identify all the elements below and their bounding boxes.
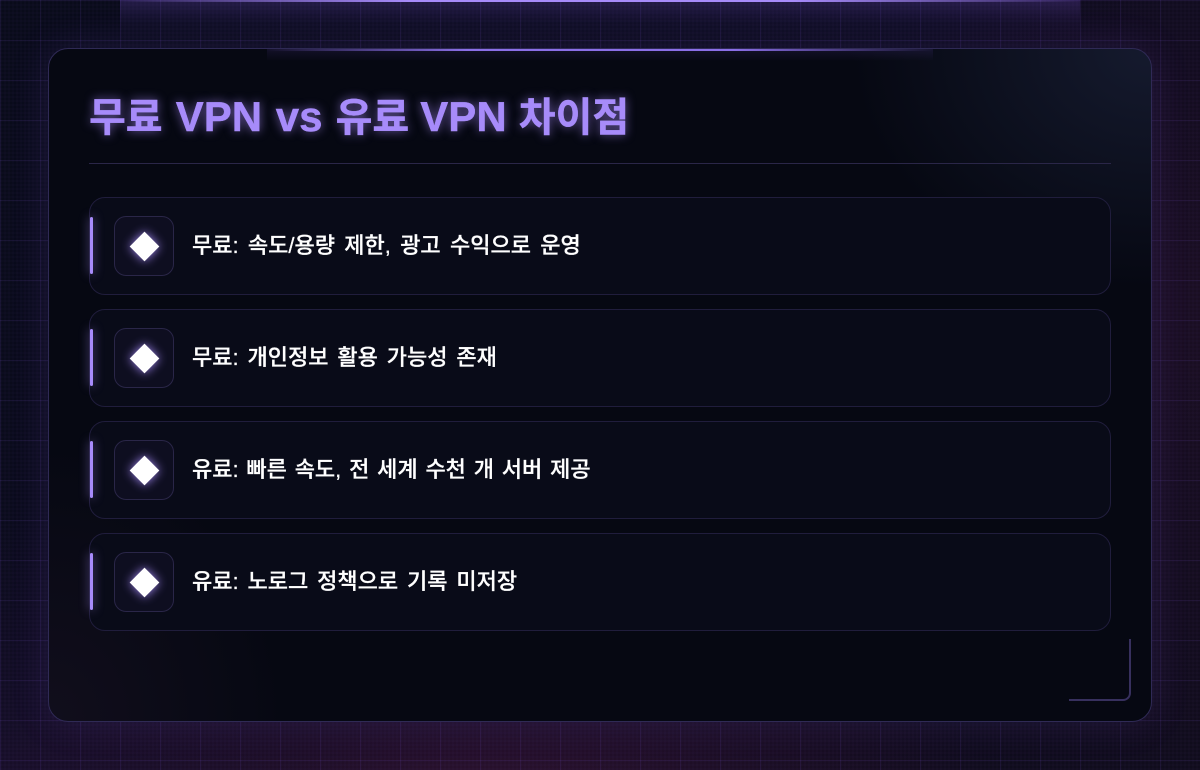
text: item 4: 유료: 노로그 정책으로 기록 미저장 <box>192 569 517 594</box>
icon: diamond <box>114 328 174 388</box>
top glow bar <box>120 0 1080 40</box>
text: item 3: 유료: 빠른 속도, 전 세계 수천 개 서버 제공 <box>192 457 591 482</box>
icon: diamond <box>114 216 174 276</box>
list item 3 <box>89 421 1111 519</box>
title: 무료 VPN vs 유료 VPN 차이점 <box>89 93 629 140</box>
text: item 2: 무료: 개인정보 활용 가능성 존재 <box>192 345 497 370</box>
icon: diamond <box>114 552 174 612</box>
list item 2 <box>89 309 1111 407</box>
list item 4 <box>89 533 1111 631</box>
list item 1 <box>89 197 1111 295</box>
icon: diamond <box>114 440 174 500</box>
text: item 1: 무료: 속도/용량 제한, 광고 수익으로 운영 <box>192 233 581 258</box>
corner bracket <box>1069 639 1131 701</box>
